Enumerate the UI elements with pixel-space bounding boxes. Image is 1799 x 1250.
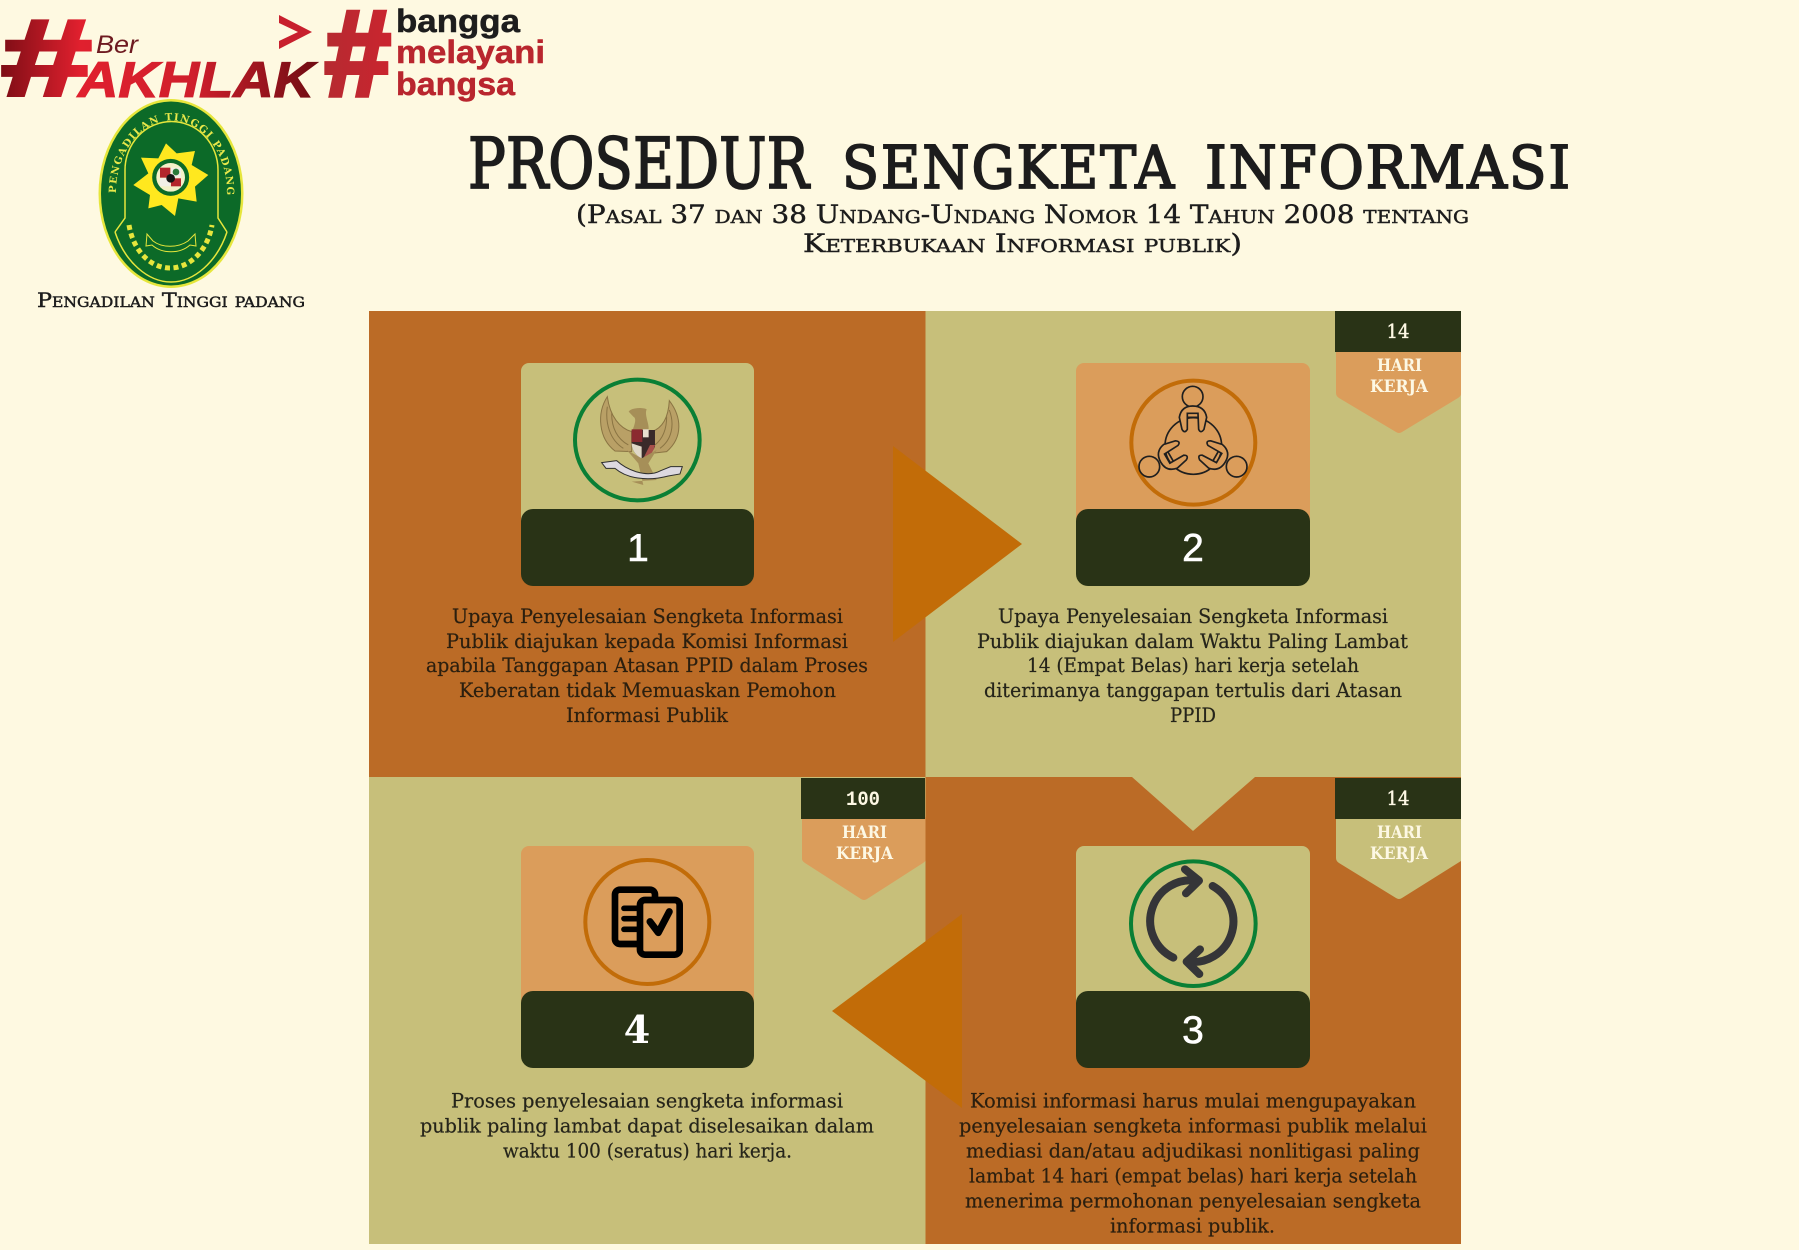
badge: 100 hari kerja (step 4): KERJA [836, 844, 894, 864]
logo: #banggamelayanibangsa [323, 0, 545, 121]
text: step 1: Upaya Penyelesaian Sengketa Informasi [452, 604, 843, 628]
text: step 3: informasi publik. [1110, 1214, 1275, 1238]
logo: #BerAKHLAK [0, 0, 318, 118]
emblem: Pengadilan Tinggi Padang [98, 99, 244, 288]
text: step 1 [426, 604, 868, 727]
text: step 4: waktu 100 (seratus) hari kerja. [503, 1138, 792, 1162]
text: step 1: Keberatan tidak Memuaskan Pemohon [459, 678, 836, 702]
badge: 100 hari kerja (step 4): HARI [842, 823, 887, 843]
text: step 3: menerima permohonan penyelesaian sengketa [965, 1188, 1421, 1212]
panel: step 1 [369, 311, 926, 777]
badge: 14 hari kerja (step 2): 14 [1386, 319, 1410, 343]
text: step 2: PPID [1170, 703, 1216, 727]
icon: refresh arrows [1131, 861, 1256, 986]
badge: 14 hari kerja (step 2): HARI [1377, 356, 1422, 376]
emblem: Pengadilan Tinggi Padang: PENGADILAN TINGGI PADANG [108, 112, 234, 194]
text: step 2: Publik diajukan dalam Waktu Paling Lambat [977, 629, 1408, 653]
icon: three people [1131, 381, 1255, 505]
badge: 14 hari kerja (step 3): 14 [1386, 786, 1410, 810]
badge: 14 hari kerja (step 3): KERJA [1370, 844, 1429, 864]
text: step 3: lambat 14 hari (empat belas) hari kerja setelah [969, 1164, 1417, 1188]
text: step 3: penyelesaian sengketa informasi publik melalui [959, 1114, 1427, 1138]
title: PROSEDUR [468, 123, 811, 205]
subtitle [576, 200, 1469, 258]
badge: 14 hari kerja (step 3): HARI [1377, 823, 1422, 843]
panel: step 2 [926, 311, 1461, 777]
text: step 3: mediasi dan/atau adjudikasi nonlitigasi paling [966, 1138, 1420, 1162]
title: INFORMASI [1205, 133, 1572, 202]
text: step 2: Upaya Penyelesaian Sengketa Informasi [998, 604, 1388, 628]
arrow: step 3 to 4 [832, 914, 962, 1108]
text: step 4 [420, 1088, 874, 1162]
logo: #banggamelayanibangsa: melayani [396, 34, 545, 70]
text: step 1: apabila Tanggapan Atasan PPID dalam Proses [426, 653, 868, 677]
text: step 1: Publik diajukan kepada Komisi Informasi [446, 629, 848, 653]
arrow: step 2 to 3 [1132, 777, 1255, 831]
badge: 100 hari kerja (step 4): 100 [846, 789, 880, 812]
text: step 3 [959, 1088, 1427, 1238]
badge: 14 hari kerja (step 2): KERJA [1370, 377, 1429, 397]
subtitle: Keterbukaan Informasi publik) [803, 229, 1242, 258]
badge: 14 hari kerja (step 2) [1335, 311, 1461, 433]
logo: #banggamelayanibangsa: bangsa [396, 66, 515, 102]
icon: documents with check [585, 860, 709, 984]
title: SENGKETA [842, 133, 1176, 202]
number 3: 3 [1182, 1009, 1204, 1052]
text: step 4: Proses penyelesaian sengketa informasi [451, 1088, 843, 1112]
text: step 1: Informasi Publik [566, 703, 729, 727]
arrow: step 1 to 2 [893, 446, 1022, 642]
text: step 2: diterimanya tanggapan tertulis dari Atasan [984, 678, 1402, 702]
text: step 4: publik paling lambat dapat diselesaikan dalam [420, 1114, 874, 1138]
title [468, 123, 1572, 205]
number 2: 2 [1182, 527, 1204, 570]
card: step 3 [1076, 846, 1310, 1068]
panel: step 4 [369, 777, 926, 1244]
logo: #banggamelayanibangsa: bangga [396, 3, 520, 39]
panel: step 3 [926, 777, 1461, 1244]
badge: 14 hari kerja (step 3) [1335, 778, 1461, 899]
icon: garuda [575, 380, 700, 500]
logo: #BerAKHLAK: Ber [96, 31, 140, 59]
subtitle: (Pasal 37 dan 38 Undang-Undang Nomor 14 Tahun 2008 tentang [576, 200, 1469, 229]
text: step 2 [977, 604, 1408, 727]
emblem caption: Pengadilan Tinggi padang [37, 288, 305, 312]
number 1: 1 [627, 527, 649, 570]
text: step 3: Komisi informasi harus mulai mengupayakan [970, 1088, 1416, 1112]
card: step 1 [521, 363, 754, 586]
logo: #BerAKHLAK: AKHLAK [76, 52, 318, 108]
number 4: 4 [624, 1007, 650, 1052]
card: step 2 [1076, 363, 1310, 586]
badge: 100 hari kerja (step 4) [801, 778, 926, 900]
text: step 2: 14 (Empat Belas) hari kerja setelah [1027, 653, 1359, 677]
card: step 4 [521, 846, 754, 1068]
